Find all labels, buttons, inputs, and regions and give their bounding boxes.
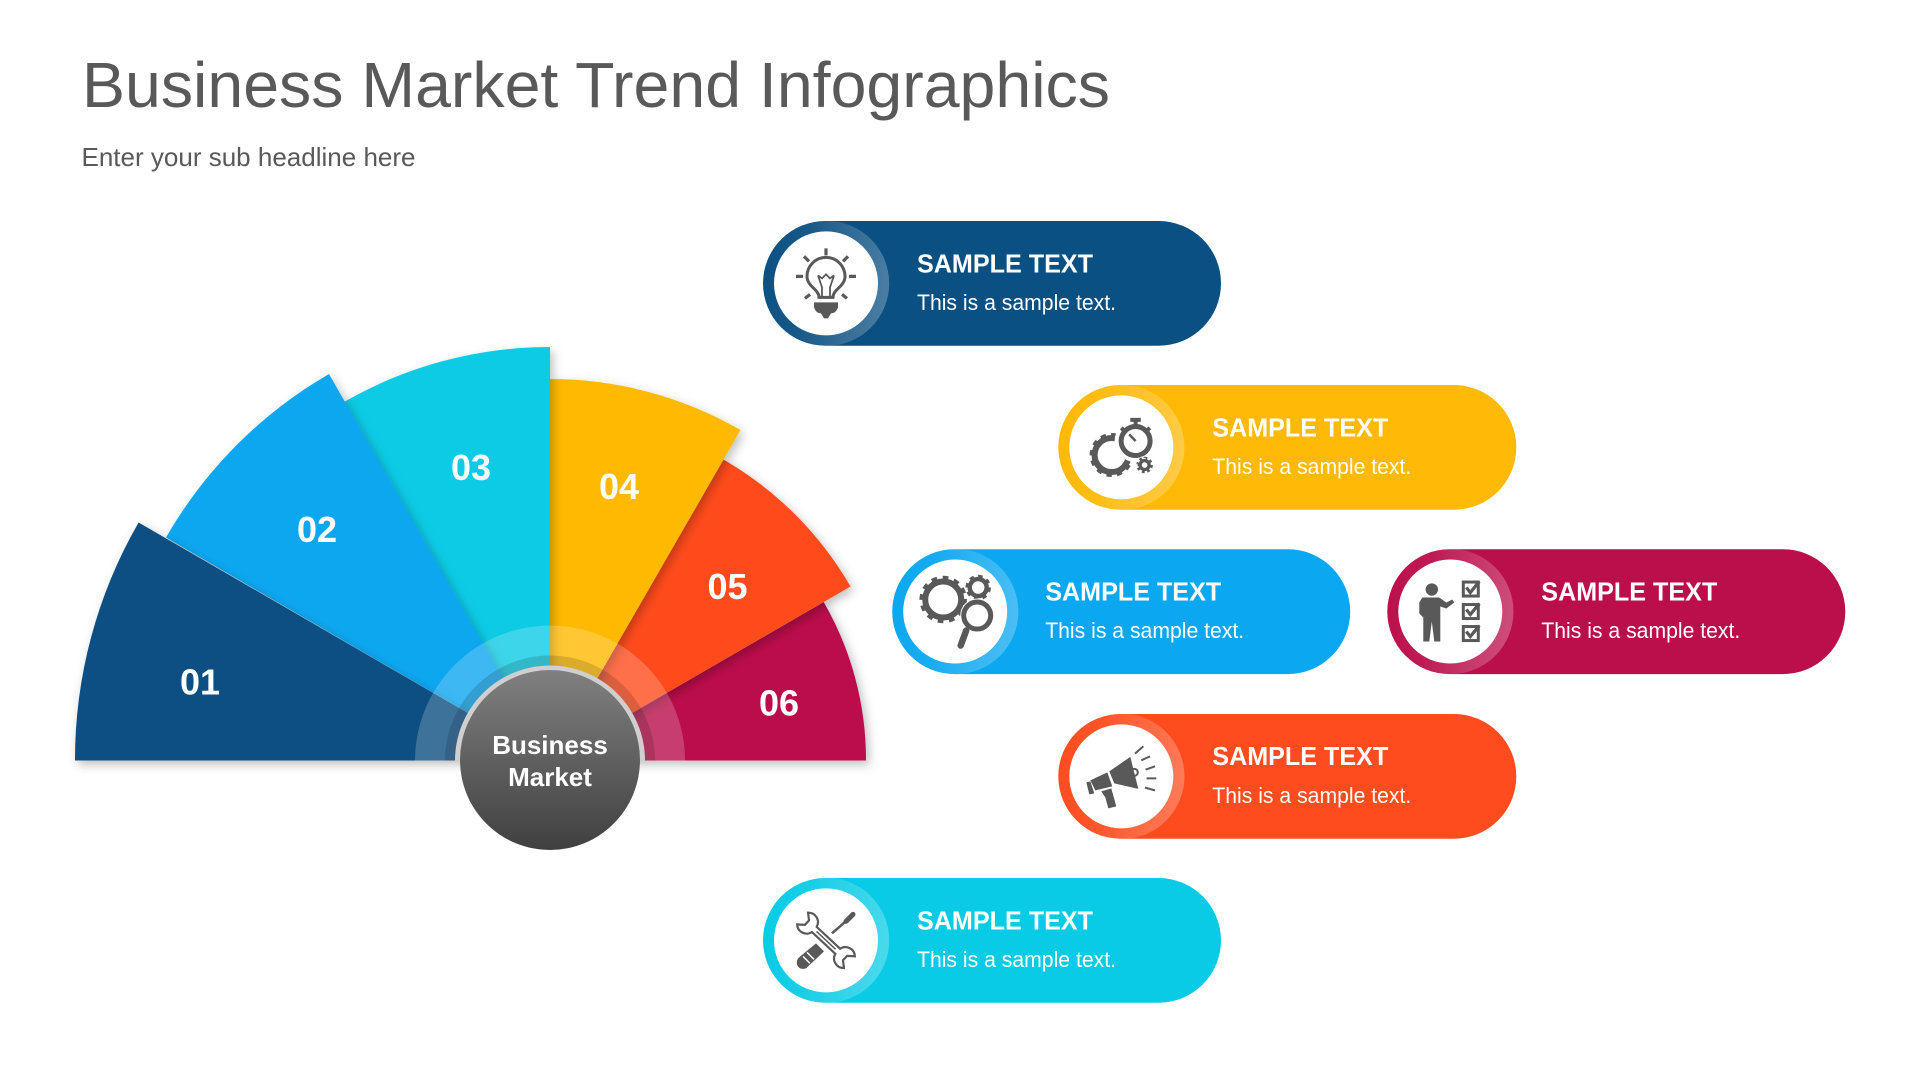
text block: SAMPLE TEXT [1045, 576, 1221, 606]
icon: person and checklist [1419, 582, 1479, 642]
text block: This is a sample text. [917, 947, 1116, 972]
text block: This is a sample text. [1045, 618, 1244, 643]
pill 4: crimson, person and checklist [1387, 549, 1845, 674]
inner dark halo [445, 656, 655, 760]
text block [917, 249, 1116, 315]
segment 05 [550, 460, 850, 760]
title: Business Market Trend Infographics [82, 49, 1110, 121]
pill 3: blue, gears and magnifier [892, 549, 1350, 674]
grey ring [455, 666, 645, 760]
segment 04 [550, 379, 740, 760]
centre label: Market [508, 762, 592, 792]
segment 03 [344, 347, 550, 760]
text block: SAMPLE TEXT [1212, 413, 1388, 443]
pill 6: cyan, wrench and screwdriver [763, 878, 1221, 1003]
text block: SAMPLE TEXT [917, 906, 1093, 936]
icon: wrench and screwdriver [795, 911, 857, 970]
text block [1212, 413, 1411, 479]
text block [1541, 576, 1740, 643]
text block: SAMPLE TEXT [1541, 576, 1717, 606]
text block: This is a sample text. [917, 290, 1116, 315]
pill 5: orange, megaphone [1058, 714, 1516, 839]
icon: gears and magnifier [922, 577, 994, 646]
semicircle fan chart [75, 347, 866, 850]
text block [917, 906, 1116, 972]
number 04: 04 [599, 466, 639, 507]
pill 2: yellow, gears and stopwatch [1058, 385, 1516, 510]
number 01: 01 [180, 662, 220, 702]
icon: light bulb [796, 248, 856, 318]
text block: This is a sample text. [1212, 454, 1411, 479]
text block: SAMPLE TEXT [1212, 741, 1388, 771]
text block [1045, 576, 1244, 643]
text block: SAMPLE TEXT [917, 249, 1093, 279]
segment 02 [166, 374, 550, 760]
icon: megaphone [1086, 746, 1156, 808]
subtitle: Enter your sub headline here [82, 142, 416, 172]
centre label [492, 730, 608, 792]
centre label: Business [492, 730, 608, 760]
centre circle [460, 670, 640, 850]
icon: gears and stopwatch [1092, 420, 1157, 475]
pill 1: navy, light bulb [763, 221, 1221, 346]
number 06: 06 [759, 682, 799, 724]
text block: This is a sample text. [1212, 783, 1411, 808]
segment 01 [75, 522, 550, 760]
text block [1212, 741, 1411, 808]
number 02: 02 [297, 509, 337, 550]
segment 06 [550, 602, 866, 760]
outer translucent halo [415, 626, 685, 760]
number 05: 05 [707, 566, 748, 607]
text block: This is a sample text. [1541, 618, 1740, 643]
number 03: 03 [451, 447, 491, 488]
